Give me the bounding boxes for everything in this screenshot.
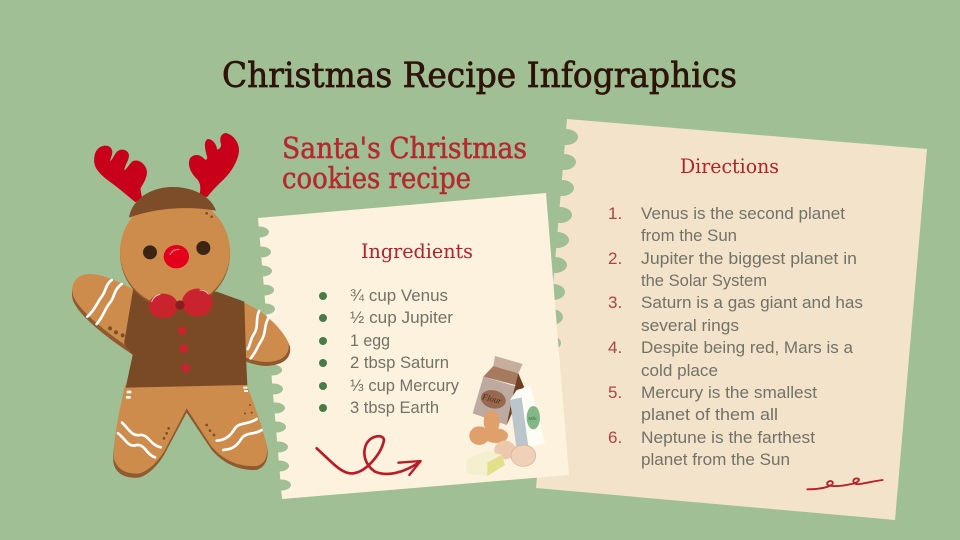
ingredients list: ½ cup Jupiter bbox=[350, 308, 453, 327]
directions list: 2. bbox=[608, 249, 622, 268]
ingredients list: ⅓ cup Mercury bbox=[350, 376, 459, 395]
ingredients list: ¾ cup Venus bbox=[350, 286, 448, 305]
directions list: from the Sun bbox=[641, 226, 737, 245]
subtitle bbox=[282, 131, 527, 195]
eyes bbox=[143, 241, 210, 259]
butter bbox=[466, 451, 505, 476]
panel: directions bbox=[536, 119, 927, 520]
directions list: cold place bbox=[641, 361, 718, 380]
milk carton: Milk bbox=[528, 416, 537, 421]
ingredients heading: Ingredients bbox=[361, 239, 473, 263]
antlers bbox=[95, 134, 238, 201]
buttons bbox=[178, 326, 190, 372]
arrow bbox=[317, 436, 421, 475]
directions list: 6. bbox=[608, 428, 622, 447]
ingredients list: 2 tbsp Saturn bbox=[350, 353, 449, 372]
directions list: planet of them all bbox=[641, 405, 778, 424]
directions list: 1. bbox=[608, 204, 622, 223]
directions list: several rings bbox=[641, 316, 739, 335]
panel: ingredients bbox=[249, 193, 569, 499]
subtitle: Santa's Christmas bbox=[282, 131, 527, 165]
bow tie bbox=[149, 289, 213, 318]
ingredients paper bbox=[249, 193, 569, 499]
directions list: Despite being red, Mars is a bbox=[641, 338, 854, 357]
ingredients list: 3 tbsp Earth bbox=[350, 398, 439, 417]
illustration: baking ingredients bbox=[466, 356, 545, 476]
directions list: Saturn is a gas giant and has bbox=[641, 293, 863, 312]
directions paper bbox=[536, 119, 927, 520]
left arm bbox=[72, 274, 134, 355]
title: Christmas Recipe Infographics bbox=[222, 56, 737, 96]
ingredients list bbox=[319, 286, 459, 417]
head bbox=[120, 187, 230, 309]
directions list: 4. bbox=[608, 338, 622, 357]
directions list: Mercury is the smallest bbox=[641, 383, 817, 402]
flour bag: Flour bbox=[480, 391, 503, 406]
eggs bbox=[469, 410, 508, 445]
directions list: 3. bbox=[608, 293, 622, 312]
squiggle bbox=[807, 478, 883, 489]
directions list: Venus is the second planet bbox=[641, 204, 845, 223]
subtitle: cookies recipe bbox=[282, 161, 471, 195]
vest bbox=[124, 288, 247, 388]
illustration: gingerbread man bbox=[72, 134, 290, 478]
directions heading: Directions bbox=[680, 154, 779, 178]
directions list: the Solar System bbox=[641, 271, 767, 290]
directions list bbox=[608, 204, 863, 469]
directions list: planet from the Sun bbox=[641, 450, 790, 469]
directions list: 5. bbox=[608, 383, 622, 402]
right arm bbox=[237, 303, 290, 366]
directions list: Neptune is the farthest bbox=[641, 428, 815, 447]
legs bbox=[113, 383, 268, 478]
directions list: Jupiter the biggest planet in bbox=[641, 249, 857, 268]
cookies bbox=[494, 441, 536, 466]
ingredients list: 1 egg bbox=[350, 331, 390, 350]
nose bbox=[164, 245, 189, 268]
